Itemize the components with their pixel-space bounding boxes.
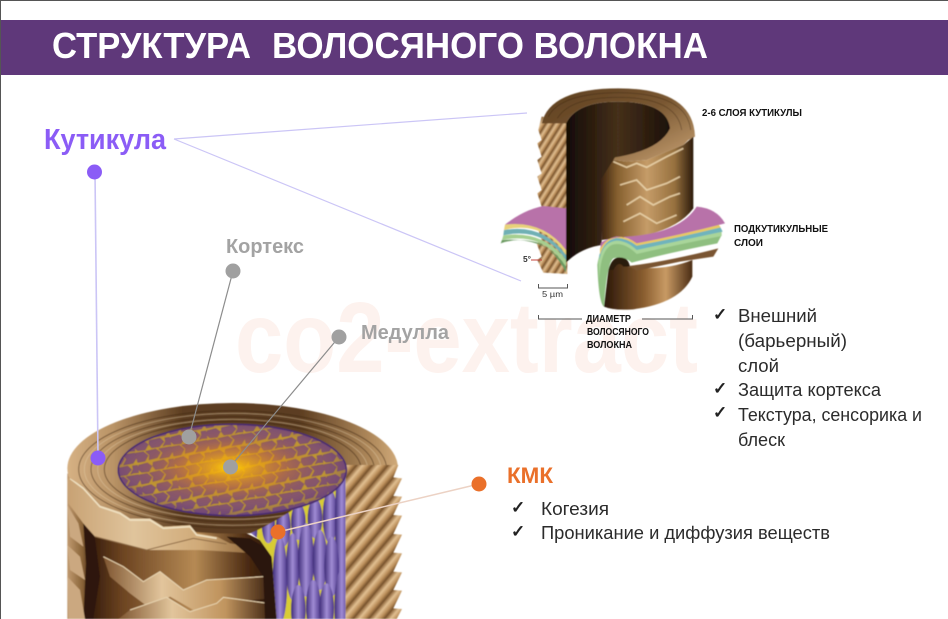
- small diagram labels: ВОЛОКНА: [587, 340, 632, 351]
- title banner: СТРУКТУРА: [52, 25, 251, 66]
- illustration: small cuticle fibre detail: [501, 88, 725, 310]
- CMC bullet list: Когезия: [541, 499, 609, 519]
- cuticle bullet list: Текстура, сенсорика и: [738, 405, 922, 425]
- right cuticle stripes: [346, 465, 402, 619]
- connector lines: [95, 113, 527, 532]
- small diagram labels: [586, 108, 828, 351]
- cuticle bullet list: Защита кортекса: [738, 380, 882, 400]
- scale brackets: [531, 260, 692, 319]
- hollow inner wall: [566, 102, 670, 263]
- small diagram labels: СЛОИ: [734, 238, 763, 249]
- cuticle bullet list: ✓: [713, 379, 727, 398]
- left cuticle stripes: [537, 117, 567, 274]
- cuticle bullet list: Внешний: [738, 306, 817, 326]
- scale labels: 5°: [523, 255, 531, 264]
- scale labels: 5 µm: [542, 290, 563, 299]
- label: medulla: Медулла: [361, 322, 450, 344]
- label: CMC: КМК: [507, 463, 554, 488]
- body of fibre with peeled cuticle: [67, 473, 280, 619]
- small diagram labels: ПОДКУТИКУЛЬНЫЕ: [734, 224, 828, 235]
- CMC bullet list: Проникание и диффузия веществ: [541, 523, 830, 543]
- small diagram labels: ВОЛОСЯНОГО: [587, 327, 649, 338]
- cuticle bullet list: блеск: [738, 430, 785, 450]
- left sub-cuticular layers: [501, 206, 566, 273]
- cuticle bullet list: слой: [738, 356, 779, 376]
- title banner: [1, 20, 948, 75]
- fibrils bundle: [250, 478, 346, 619]
- ring of cuticle layers: [542, 88, 695, 162]
- CMC bullet list: ✓: [511, 522, 525, 541]
- illustration: large hair fibre cross-section: [67, 403, 402, 619]
- title banner: ВОЛОСЯНОГО ВОЛОКНА: [272, 25, 708, 66]
- right sub-cuticular layers: [597, 207, 725, 310]
- scale labels: [523, 255, 563, 299]
- watermark: co2-extract: [235, 282, 698, 394]
- cortex and medulla top face: [118, 424, 346, 516]
- cuticle bullet list: [713, 305, 922, 450]
- small diagram labels: ДИАМЕТР: [586, 314, 631, 325]
- cuticle bullet list: ✓: [713, 403, 727, 422]
- top cuticle ring: [67, 403, 398, 534]
- small diagram labels: 2-6 СЛОЯ КУТИКУЛЫ: [702, 108, 802, 119]
- dots: [87, 164, 486, 540]
- front cuticle scales: [601, 137, 693, 240]
- CMC bullet list: ✓: [511, 498, 525, 517]
- label: cortex: Кортекс: [226, 236, 304, 258]
- cuticle bullet list: ✓: [713, 305, 727, 324]
- label: cuticle: Кутикула: [44, 124, 167, 156]
- cuticle bullet list: (барьерный): [738, 331, 847, 351]
- CMC bullet list: [511, 498, 830, 543]
